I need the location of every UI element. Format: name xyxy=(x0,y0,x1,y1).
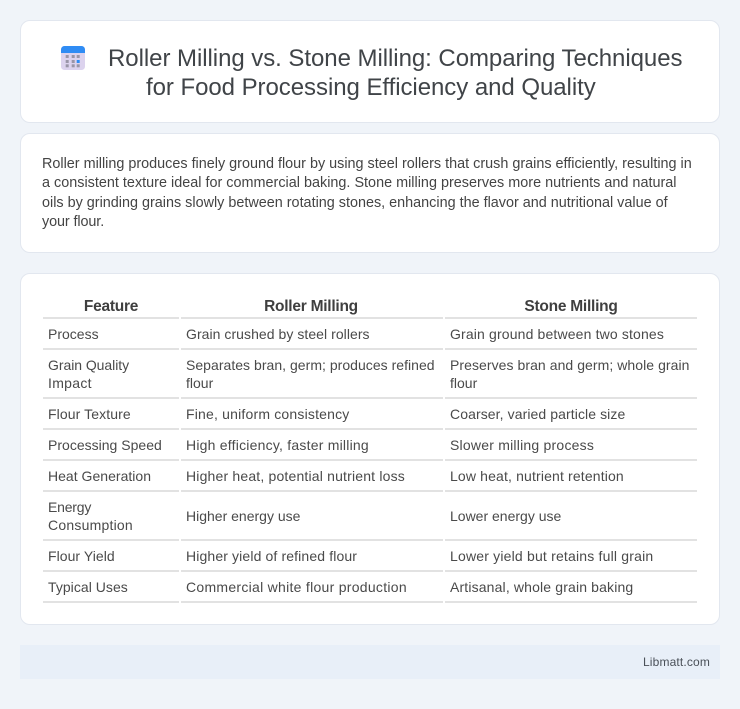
row: Typical Uses: Typical Uses xyxy=(48,579,128,595)
column header: Stone Milling: Stone Milling xyxy=(524,298,618,315)
footer bar xyxy=(20,645,720,679)
panel: introduction card xyxy=(20,133,720,253)
title xyxy=(108,45,682,101)
icon: calendar grid xyxy=(61,46,85,70)
row: Grain Quality Impact: Separates bran, germ; produces refined xyxy=(186,357,435,373)
title: for Food Processing Efficiency and Quality xyxy=(146,74,596,101)
row: Flour Texture: Coarser, varied particle size xyxy=(450,406,625,422)
row: Energy Consumption xyxy=(48,499,561,533)
row: Grain Quality Impact: flour xyxy=(450,375,477,391)
panel: comparison table card xyxy=(20,273,720,625)
row: Heat Generation xyxy=(48,468,624,484)
row: Process: Grain ground between two stones xyxy=(450,326,664,342)
title: Roller Milling vs. Stone Milling: Comparing Techniques xyxy=(108,45,682,72)
row: Processing Speed xyxy=(48,437,594,453)
row: Grain Quality Impact: flour xyxy=(186,375,213,391)
row: Flour Yield xyxy=(48,548,653,564)
row: Flour Yield: Lower yield but retains full grain xyxy=(450,548,653,564)
row: Energy Consumption: Lower energy use xyxy=(450,508,561,524)
row: Process: Process xyxy=(48,326,99,342)
row: Flour Yield: Flour Yield xyxy=(48,548,115,564)
row: Grain Quality Impact: Preserves bran and germ; whole grain xyxy=(450,357,690,373)
row: Flour Texture xyxy=(48,406,625,422)
column header: Feature: Feature xyxy=(84,298,138,315)
row: Flour Texture: Fine, uniform consistency xyxy=(186,406,349,422)
row: Processing Speed: High efficiency, faster milling xyxy=(186,437,369,453)
column header: Roller Milling: Roller Milling xyxy=(264,298,358,315)
row: Process: Grain crushed by steel rollers xyxy=(186,326,370,342)
row: Flour Yield: Higher yield of refined flour xyxy=(186,548,357,564)
row: Grain Quality Impact xyxy=(48,357,690,391)
row: Heat Generation: Higher heat, potential nutrient loss xyxy=(186,468,405,484)
row: Energy Consumption: Higher energy use xyxy=(186,508,300,524)
row: Heat Generation: Low heat, nutrient retention xyxy=(450,468,624,484)
row: Typical Uses xyxy=(48,579,633,595)
row: Typical Uses: Commercial white flour production xyxy=(186,579,407,595)
row: Energy Consumption: Consumption xyxy=(48,517,133,533)
intro paragraph: a consistent texture ideal for commercial baking. Stone milling preserves more nutrients and natural xyxy=(42,175,676,191)
row: Flour Texture: Flour Texture xyxy=(48,406,131,422)
row: Processing Speed: Processing Speed xyxy=(48,437,162,453)
row: Energy Consumption: Energy xyxy=(48,499,91,515)
row: Processing Speed: Slower milling process xyxy=(450,437,594,453)
row: Heat Generation: Heat Generation xyxy=(48,468,151,484)
row: Typical Uses: Artisanal, whole grain baking xyxy=(450,579,633,595)
intro paragraph: your flour. xyxy=(42,214,104,230)
row: Grain Quality Impact: Grain Quality xyxy=(48,357,129,373)
footer credit: Libmatt.com xyxy=(643,655,710,669)
row: Process xyxy=(48,326,664,342)
intro paragraph: oils by grinding grains slowly between rotating stones, enhancing the flavor and nutritional value of xyxy=(42,195,668,211)
comparison table xyxy=(43,298,697,603)
panel: title card xyxy=(20,20,720,123)
row: Grain Quality Impact: Impact xyxy=(48,375,92,391)
intro paragraph xyxy=(42,156,692,230)
intro paragraph: Roller milling produces finely ground flour by using steel rollers that crush grains efficiently, resulting in xyxy=(42,156,692,172)
